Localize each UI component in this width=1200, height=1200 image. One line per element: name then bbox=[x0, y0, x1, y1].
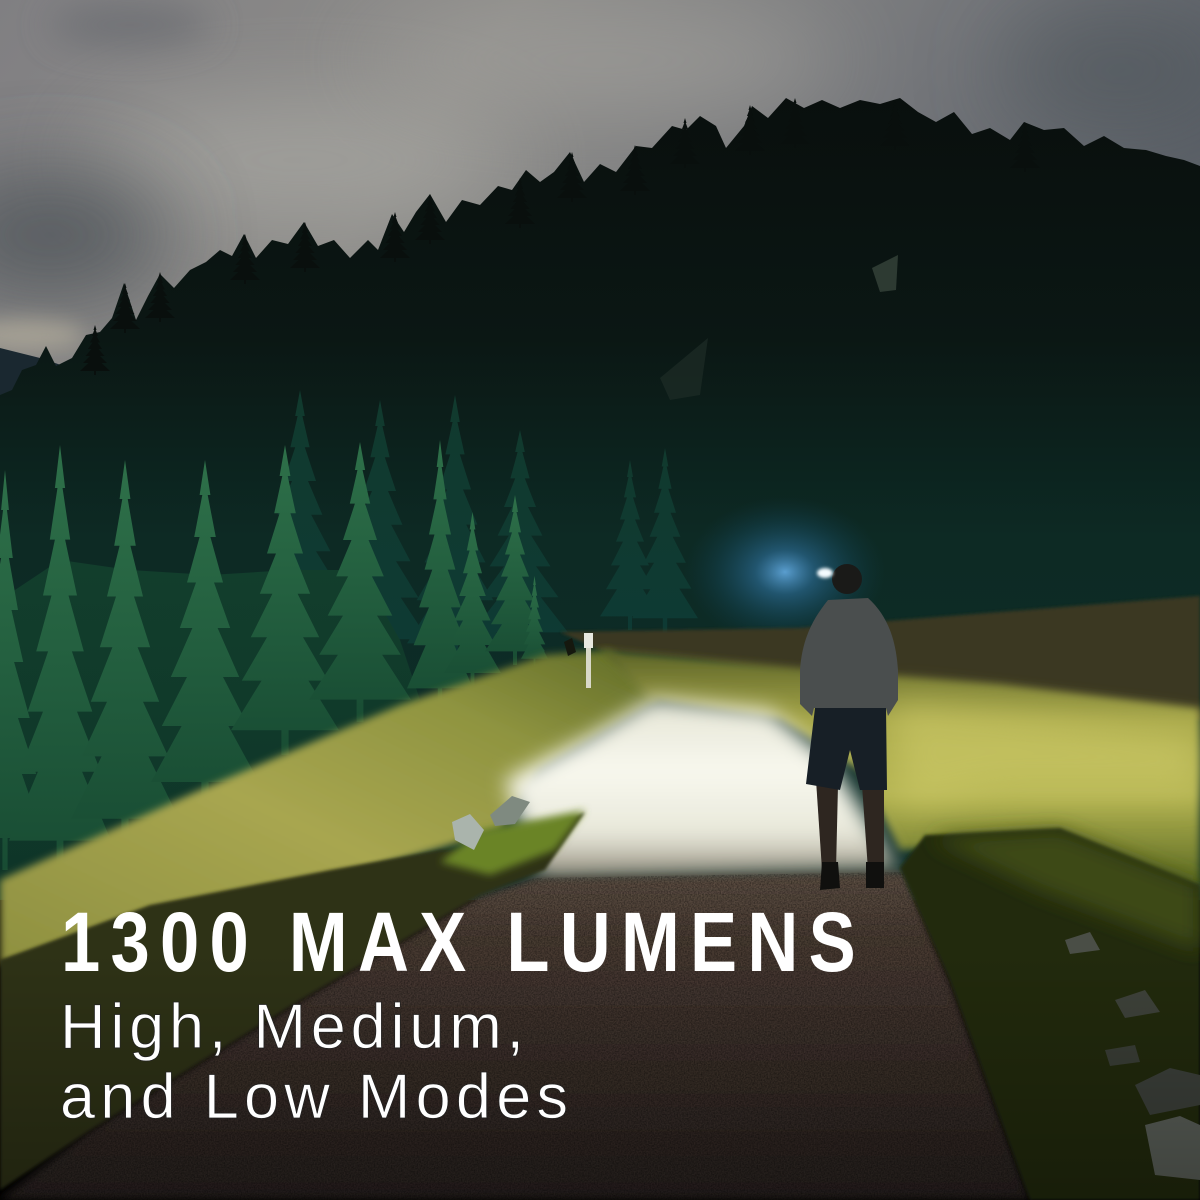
foreground gravel path bbox=[0, 872, 1030, 1200]
right leg bbox=[862, 782, 884, 870]
sky with clouds bbox=[0, 0, 1200, 480]
shorts bbox=[806, 708, 887, 790]
hoodie bbox=[800, 598, 898, 716]
left leg bbox=[816, 780, 838, 870]
mid-distance dark trees bbox=[252, 390, 698, 665]
left lit meadow bbox=[0, 650, 660, 965]
person with headlamp bbox=[800, 564, 898, 890]
head bbox=[832, 564, 862, 594]
distant hill bbox=[0, 348, 70, 420]
field in the distance, right bbox=[560, 596, 1200, 720]
signpost bbox=[564, 633, 593, 688]
darkening behind text bbox=[0, 950, 1200, 1200]
headline: 1300 MAX LUMENS bbox=[61, 896, 856, 989]
lamp bbox=[817, 568, 833, 578]
lit spruce trees on left bbox=[0, 440, 548, 900]
blue headlamp glow on trees bbox=[685, 497, 885, 647]
subheading: High, Medium, bbox=[60, 992, 524, 1062]
ridge treeline bbox=[80, 98, 1040, 375]
dark left foreground grass bbox=[0, 812, 585, 1190]
rocks bbox=[452, 796, 1200, 1180]
right lit meadow bbox=[600, 650, 1200, 890]
right shoe bbox=[866, 862, 884, 888]
dark right foreground grass bbox=[900, 828, 1200, 1200]
gravel path, lit part bbox=[505, 698, 900, 880]
left shoe bbox=[820, 862, 840, 890]
subheading bbox=[60, 992, 568, 1132]
subheading: and Low Modes bbox=[60, 1062, 568, 1132]
forested mountain silhouette bbox=[0, 98, 1200, 900]
